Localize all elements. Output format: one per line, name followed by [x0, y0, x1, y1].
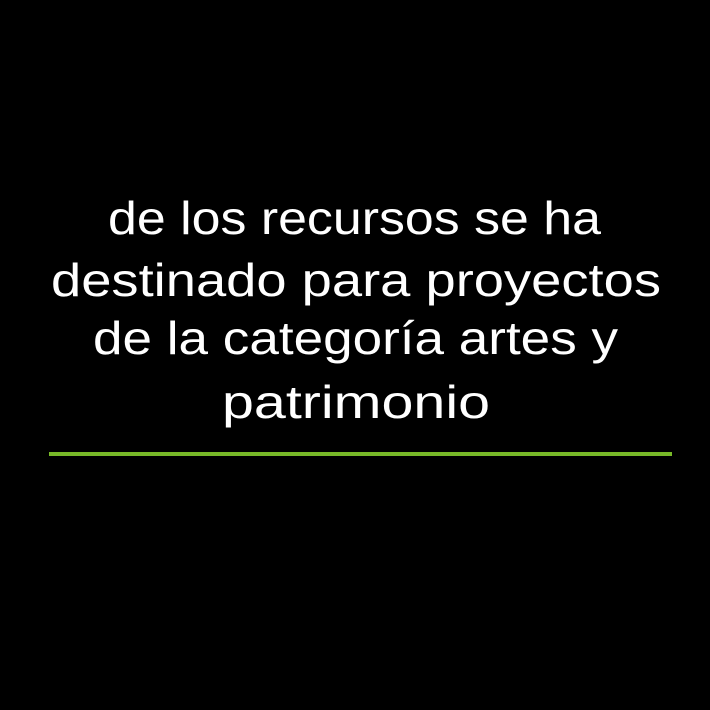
text block: statement: patrimonio: [222, 376, 490, 428]
text block: statement: de la categoría artes y: [93, 312, 618, 364]
text block: statement: destinado para proyectos: [51, 254, 661, 306]
text block: statement: [51, 192, 661, 428]
text block: statement: de los recursos se ha: [108, 192, 601, 244]
green underline: [49, 452, 672, 456]
